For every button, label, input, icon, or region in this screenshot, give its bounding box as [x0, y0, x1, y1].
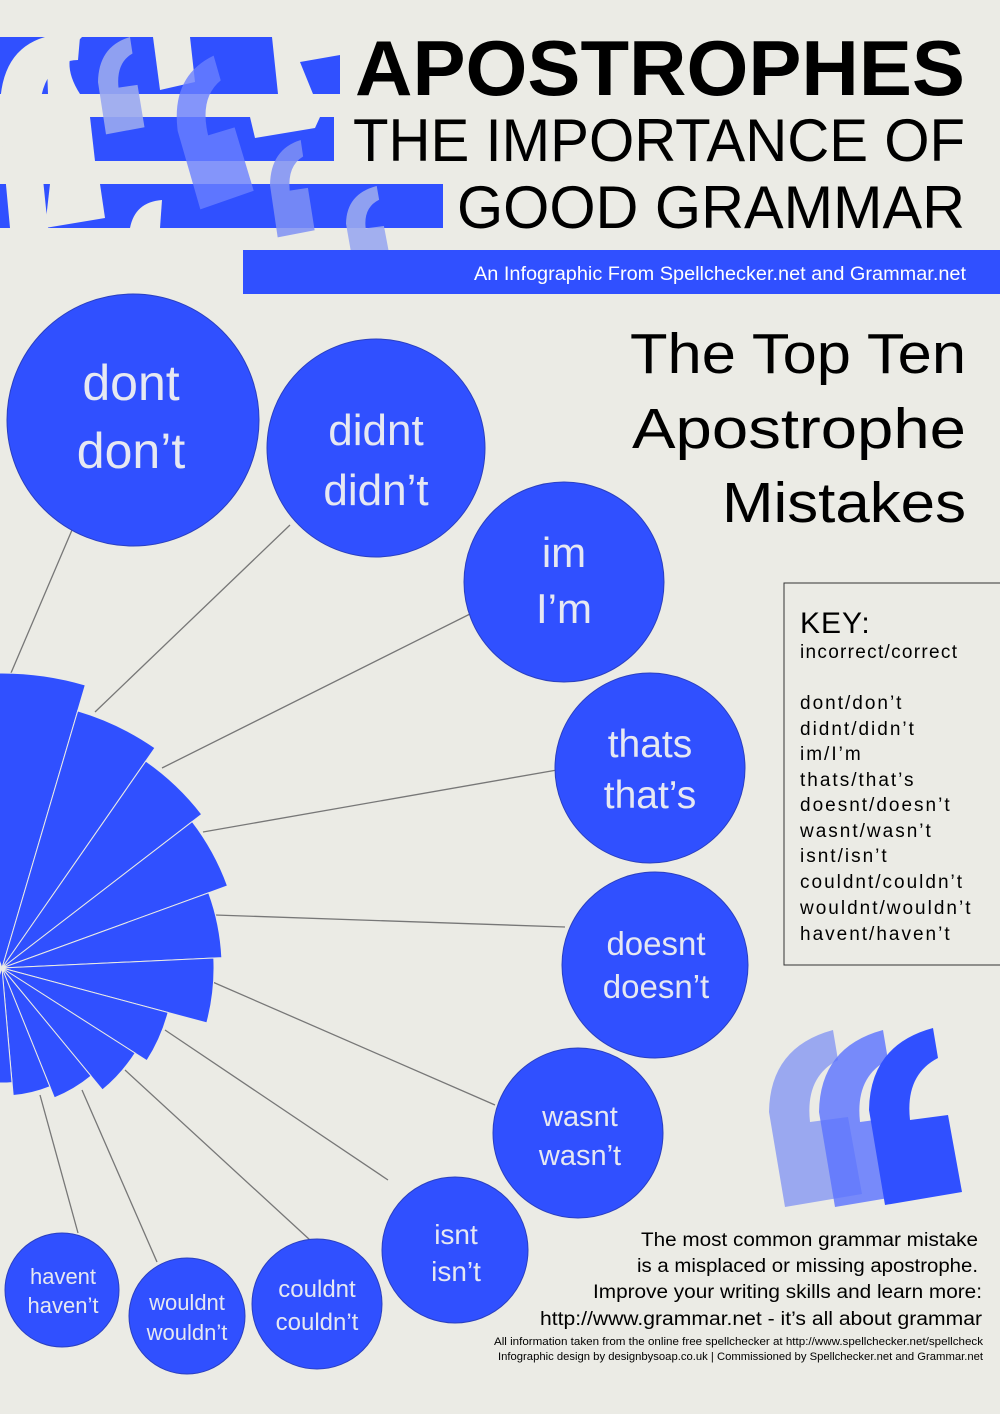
footer text	[494, 1230, 984, 1363]
circle labels: doesn’t	[603, 968, 709, 1005]
heading: top ten: Apostrophe	[632, 397, 966, 461]
circle labels: don’t	[77, 423, 185, 479]
key box: KEY:	[800, 607, 871, 640]
footer text: The most common grammar mistake	[641, 1230, 978, 1251]
key box: couldnt/couldn’t	[800, 872, 964, 893]
circle labels: im	[542, 529, 586, 576]
heading: top ten: Mistakes	[722, 471, 966, 535]
footer text: is a misplaced or missing apostrophe.	[637, 1256, 978, 1277]
circle labels: doesnt	[606, 925, 706, 962]
key box: havent/haven’t	[800, 924, 952, 945]
circle labels: wasn’t	[538, 1140, 621, 1172]
key box: wasnt/wasn’t	[799, 821, 933, 842]
circle labels: isnt	[434, 1219, 478, 1250]
circle labels	[28, 355, 709, 1345]
key box: im/I’m	[800, 744, 863, 765]
heading: top ten	[630, 322, 966, 535]
title	[353, 24, 965, 241]
circle labels: couldnt	[278, 1276, 356, 1303]
connector lines	[8, 525, 565, 1262]
key box: dont/don’t	[800, 693, 903, 714]
circle labels: thats	[608, 723, 692, 766]
key box: wouldnt/wouldn’t	[799, 898, 972, 919]
subtitle banner	[243, 250, 1000, 294]
circle labels: wouldnt	[148, 1290, 225, 1315]
circle labels: couldn’t	[276, 1309, 359, 1336]
circle labels: haven’t	[28, 1293, 98, 1318]
key box: didnt/didn’t	[800, 719, 916, 740]
title: THE IMPORTANCE OF	[353, 107, 965, 174]
icon: quote marks	[769, 1028, 962, 1207]
circle labels: I’m	[536, 585, 592, 632]
circle labels: havent	[30, 1264, 96, 1289]
fan chart	[0, 673, 227, 1098]
circle labels: didnt	[328, 406, 424, 455]
circle labels: that’s	[604, 774, 696, 817]
heading: top ten: The Top Ten	[630, 322, 966, 386]
circle labels: didn’t	[323, 466, 429, 515]
footer text: Improve your writing skills and learn more:	[593, 1282, 982, 1303]
key box	[784, 583, 1000, 965]
title: APOSTROPHES	[355, 24, 965, 112]
footer text: Infographic design by designbysoap.co.uk | Commissioned by Spellchecker.net and Grammar.net	[498, 1351, 983, 1363]
subtitle banner: An Infographic From Spellchecker.net and Grammar.net	[474, 264, 967, 285]
circles	[5, 294, 748, 1374]
key box: thats/that’s	[800, 770, 916, 791]
footer text: All information taken from the online free spellchecker at http://www.spellchecker.net/spellcheck	[494, 1336, 984, 1348]
key box: isnt/isn’t	[800, 846, 889, 867]
footer text: http://www.grammar.net - it’s all about grammar	[540, 1309, 983, 1330]
circle labels: dont	[82, 355, 180, 411]
key box: incorrect/correct	[800, 642, 958, 663]
circle labels: isn’t	[431, 1256, 481, 1287]
circle labels: wouldn’t	[146, 1320, 227, 1345]
key box: doesnt/doesn’t	[800, 795, 952, 816]
title: GOOD GRAMMAR	[457, 174, 965, 241]
circle labels: wasnt	[541, 1101, 618, 1133]
header decoration	[0, 37, 443, 267]
